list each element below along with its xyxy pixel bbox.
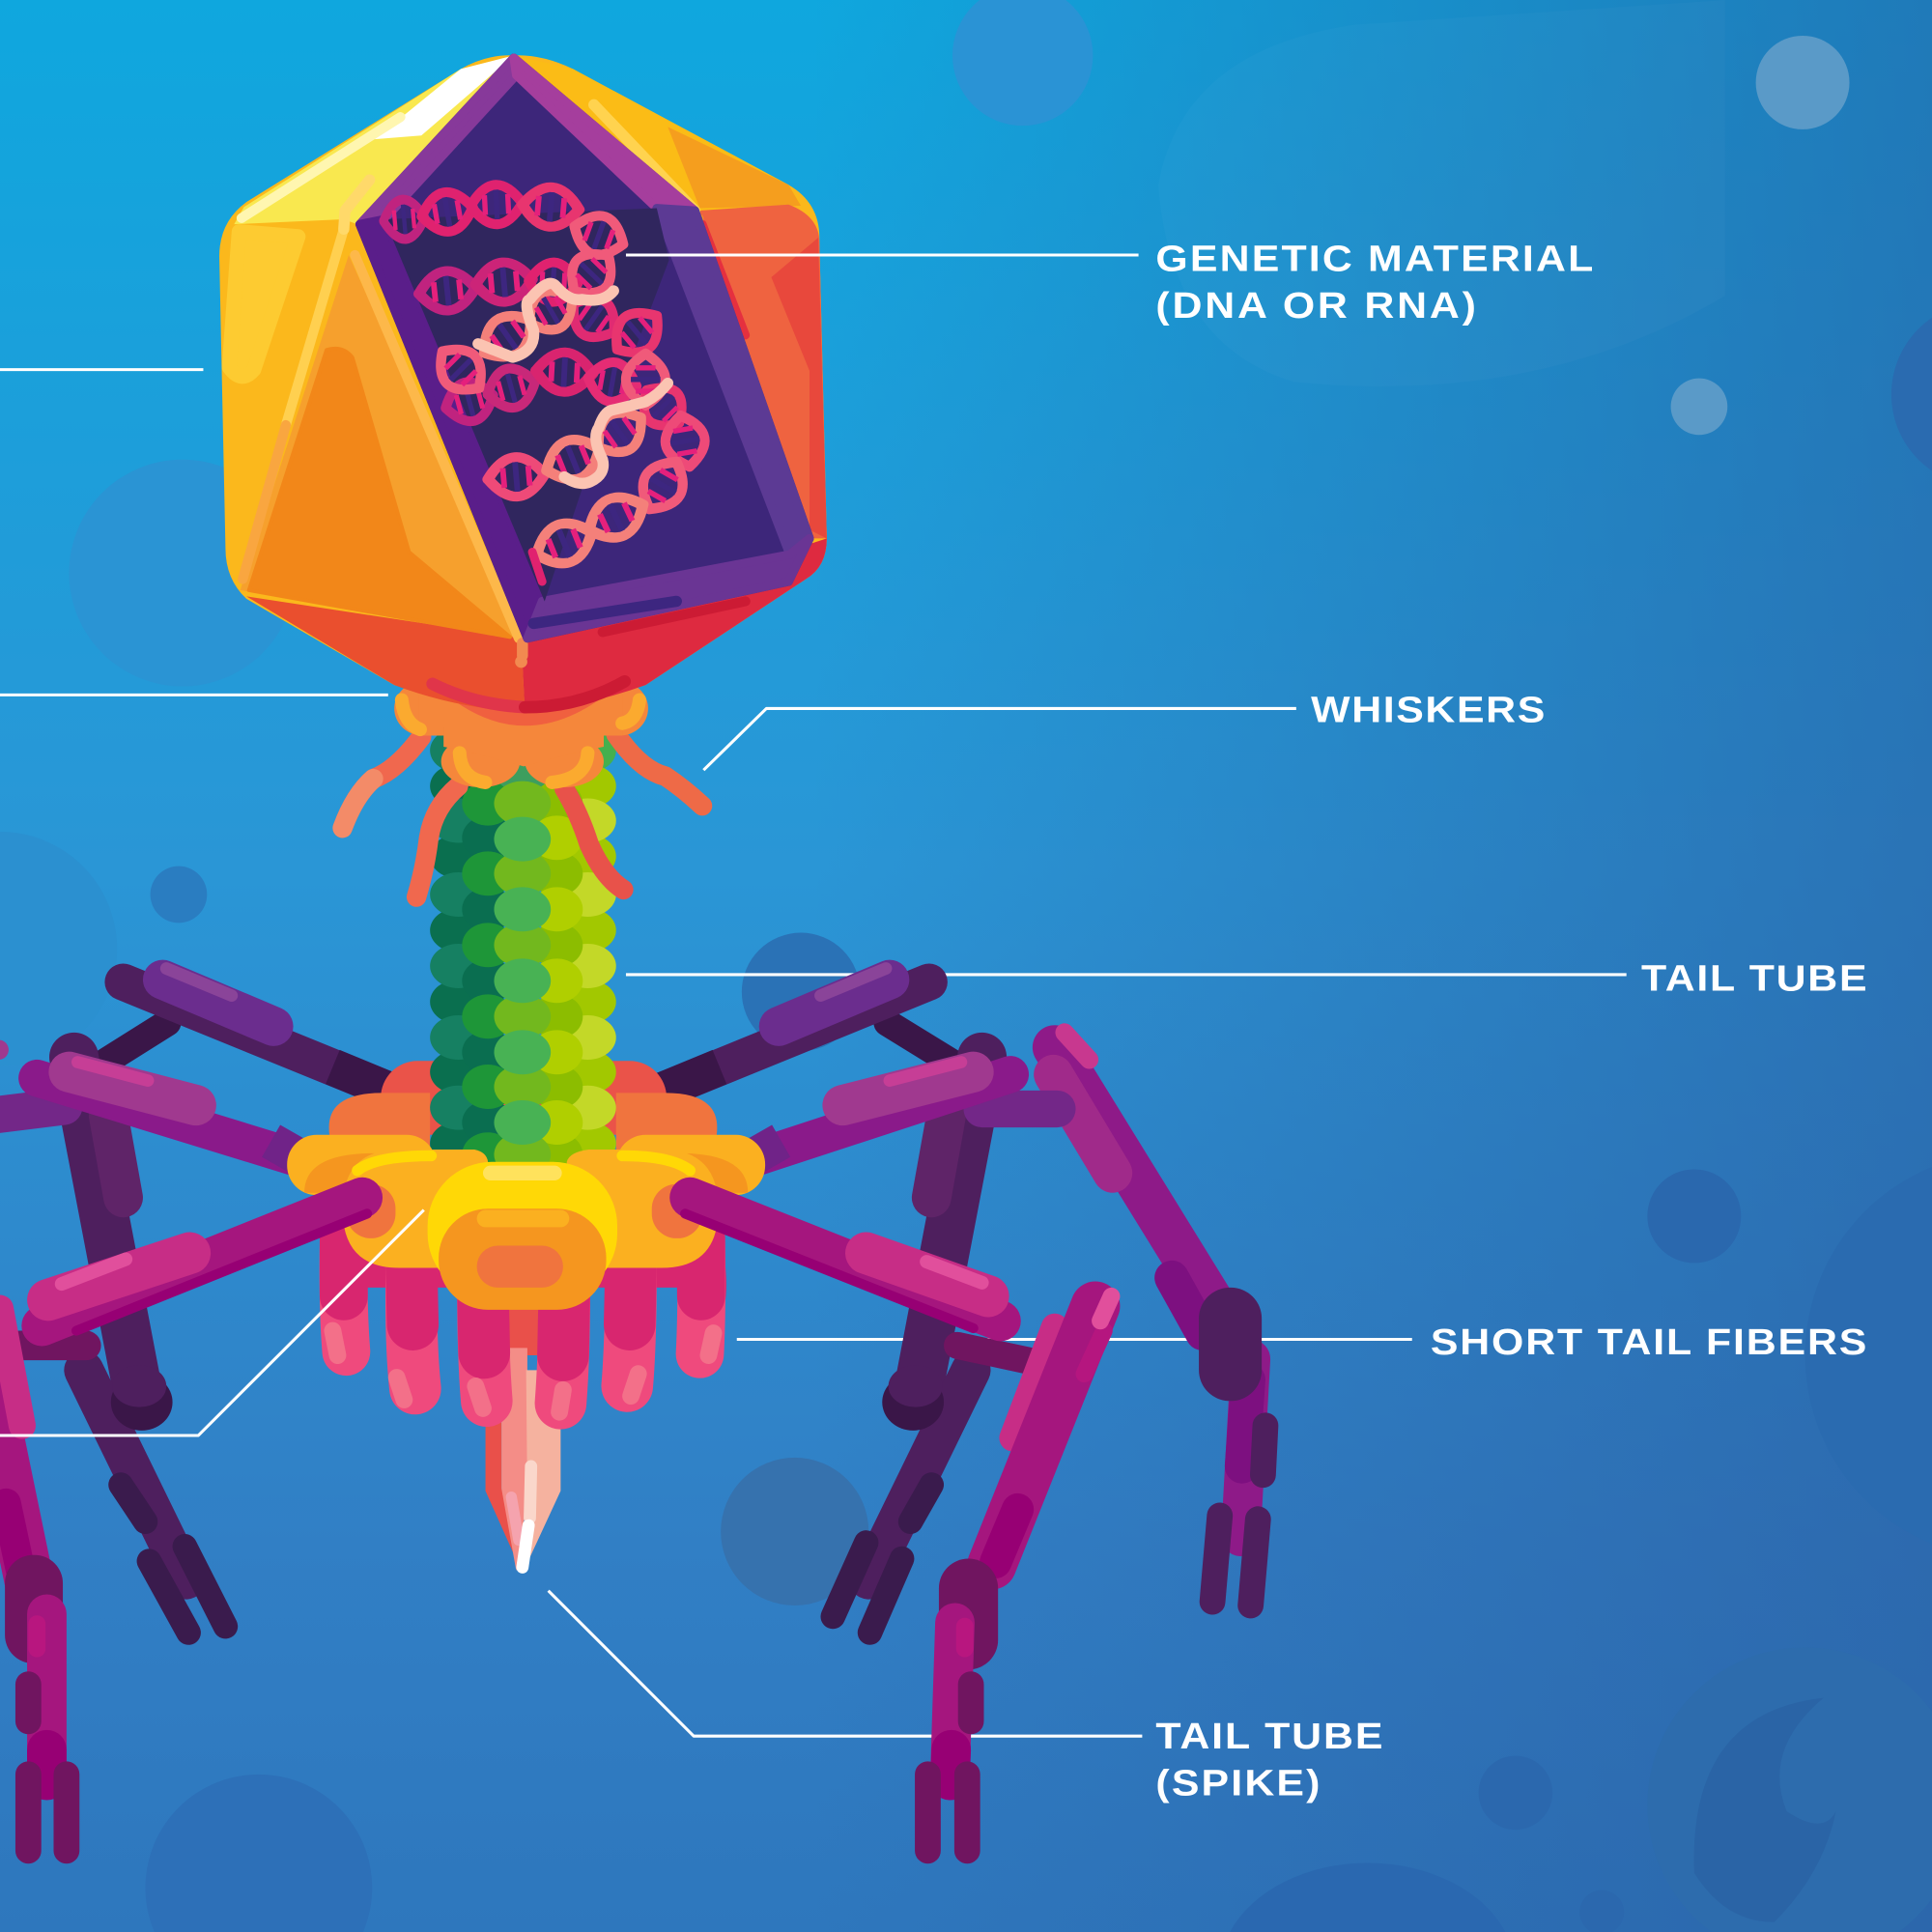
label: genetic material: (DNA OR RNA)	[1155, 284, 1476, 327]
leader line: capsid	[0, 368, 203, 371]
tube column 4	[531, 781, 582, 1177]
label: whiskers: WHISKERS	[1311, 689, 1545, 730]
fiber 6	[699, 1238, 714, 1355]
DNA strand: lower loop	[529, 376, 709, 582]
capsid white shine	[375, 55, 514, 139]
back legs: dark	[74, 969, 982, 1633]
panel inner back wall	[384, 209, 669, 601]
DNA light strand top	[478, 283, 613, 357]
capsid silhouette	[219, 55, 827, 706]
leader line: collar	[0, 694, 388, 696]
capsid orange triangle	[241, 255, 522, 639]
fiber 2	[397, 1269, 415, 1400]
leader line: short tail fibers	[737, 1338, 1412, 1341]
DNA strand: third row	[440, 351, 640, 427]
label: genetic material: GENETIC MATERIAL	[1155, 238, 1593, 279]
capsid top right face	[514, 55, 801, 211]
DNA light strand bottom	[564, 384, 668, 483]
base plate	[287, 1135, 765, 1310]
capsid lower right face	[522, 538, 827, 712]
tail tube	[430, 728, 616, 1177]
leader line: genetic material	[626, 254, 1139, 256]
tube column 2	[462, 746, 514, 1177]
genetic material	[382, 184, 709, 582]
fiber 4	[559, 1293, 564, 1412]
whiskers	[343, 734, 702, 897]
label: tail tube spike: (SPIKE)	[1155, 1762, 1320, 1804]
capsid left highlight	[229, 232, 298, 377]
DNA strand: salmon upper	[429, 242, 623, 402]
leader line: whiskers	[703, 708, 1296, 770]
DNA strand: second row	[417, 260, 669, 364]
base plate back layers	[329, 1061, 717, 1164]
tube column 3	[494, 748, 551, 1177]
open panel frame	[359, 58, 810, 639]
tube column 1	[430, 728, 487, 1166]
label: tail tube spike	[1155, 1715, 1382, 1804]
DNA strand: salmon lower	[486, 354, 666, 499]
middle legs: purple	[0, 1040, 1057, 1161]
leader line: tail tube	[626, 974, 1627, 976]
leader line: spike	[549, 1591, 1142, 1736]
capsid top left band	[234, 55, 514, 224]
fiber 5	[627, 1269, 639, 1396]
capsid lower left face	[246, 596, 525, 712]
spike	[486, 1306, 560, 1574]
collar	[394, 681, 648, 787]
far right leg	[1054, 1033, 1265, 1605]
capsid head	[219, 55, 827, 712]
short tail fibers and spike	[321, 1233, 726, 1574]
label: tail tube spike: TAIL TUBE	[1155, 1715, 1382, 1756]
label: tail tube: TAIL TUBE	[1641, 957, 1867, 999]
front left legs: magenta	[0, 1198, 367, 1851]
tube column 5	[559, 728, 616, 1166]
capsid right face	[697, 205, 827, 538]
front right legs: magenta	[685, 1198, 1112, 1851]
fiber bar	[321, 1233, 726, 1306]
label: genetic material	[1155, 238, 1593, 327]
leader line: base plate	[0, 1210, 424, 1435]
label: short tail fibers: SHORT TAIL FIBERS	[1431, 1321, 1866, 1362]
fiber 3	[475, 1293, 487, 1408]
fiber 1	[332, 1238, 346, 1355]
DNA strand: first row	[382, 184, 630, 263]
